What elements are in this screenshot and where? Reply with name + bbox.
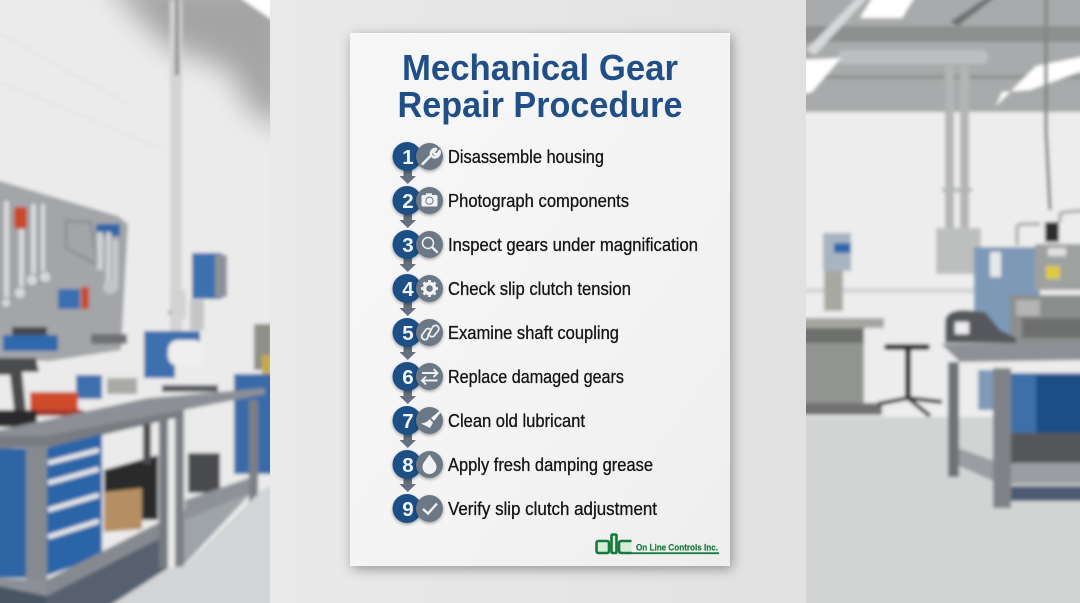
step 6: Replace damaged gears: Replace damaged gears [448,366,624,387]
icon: camera [422,193,438,206]
step 1: Disassemble housing: Disassemble housing [448,146,604,167]
step 9: Verify slip clutch adjustment: 9 [402,498,414,521]
step 2: Photograph components: 2 [402,190,414,213]
icon: wrench [422,149,440,164]
step 8: Apply fresh damping grease: 8 [402,454,414,477]
logo: On Line Controls Inc. [596,534,719,554]
step 7: Clean old lubricant: Clean old lubricant [448,410,585,431]
step 4: Check slip clutch tension [392,274,631,303]
step 3: Inspect gears under magnification [392,230,698,259]
step 2: Photograph components: Photograph components [448,190,629,211]
step 6: Replace damaged gears [392,362,624,391]
step 4: Check slip clutch tension: 4 [402,278,414,301]
background: left workshop scene [0,0,290,603]
panel: poster [350,33,730,566]
icon: check mark [423,504,437,514]
step 8: Apply fresh damping grease: Apply fresh damping grease [448,454,653,475]
title: Repair Procedure [398,84,682,125]
step 8: Apply fresh damping grease [392,450,653,479]
step 6: Replace damaged gears: 6 [402,366,414,389]
step 1: Disassemble housing: 1 [402,146,414,169]
step 9: Verify slip clutch adjustment: Verify slip clutch adjustment [448,498,657,519]
step 5: Examine shaft coupling: 5 [402,322,414,345]
background: right workshop scene [796,0,1080,603]
step 7: Clean old lubricant: 7 [402,410,414,433]
step 3: Inspect gears under magnification: Inspect gears under magnification [448,234,698,255]
title [398,47,682,125]
step 2: Photograph components [392,186,629,215]
step 9: Verify slip clutch adjustment [392,494,657,523]
icon: brush [421,410,441,428]
icon: gear [421,280,438,297]
step 7: Clean old lubricant [392,406,585,435]
title: Mechanical Gear [402,47,678,88]
step 3: Inspect gears under magnification: 3 [402,234,414,257]
icon: magnifier [422,238,437,252]
step 1: Disassemble housing [392,142,604,171]
step 5: Examine shaft coupling: Examine shaft coupling [448,322,619,343]
background: central wall panel [270,0,806,603]
icon: chain link [422,325,439,340]
step 5: Examine shaft coupling [392,318,619,347]
step 4: Check slip clutch tension: Check slip clutch tension [448,278,631,299]
icon: drop [422,454,436,474]
logo: On Line Controls Inc.: On Line Controls Inc. [636,542,718,554]
arrows between steps [400,170,416,492]
icon: swap arrows [422,369,438,384]
